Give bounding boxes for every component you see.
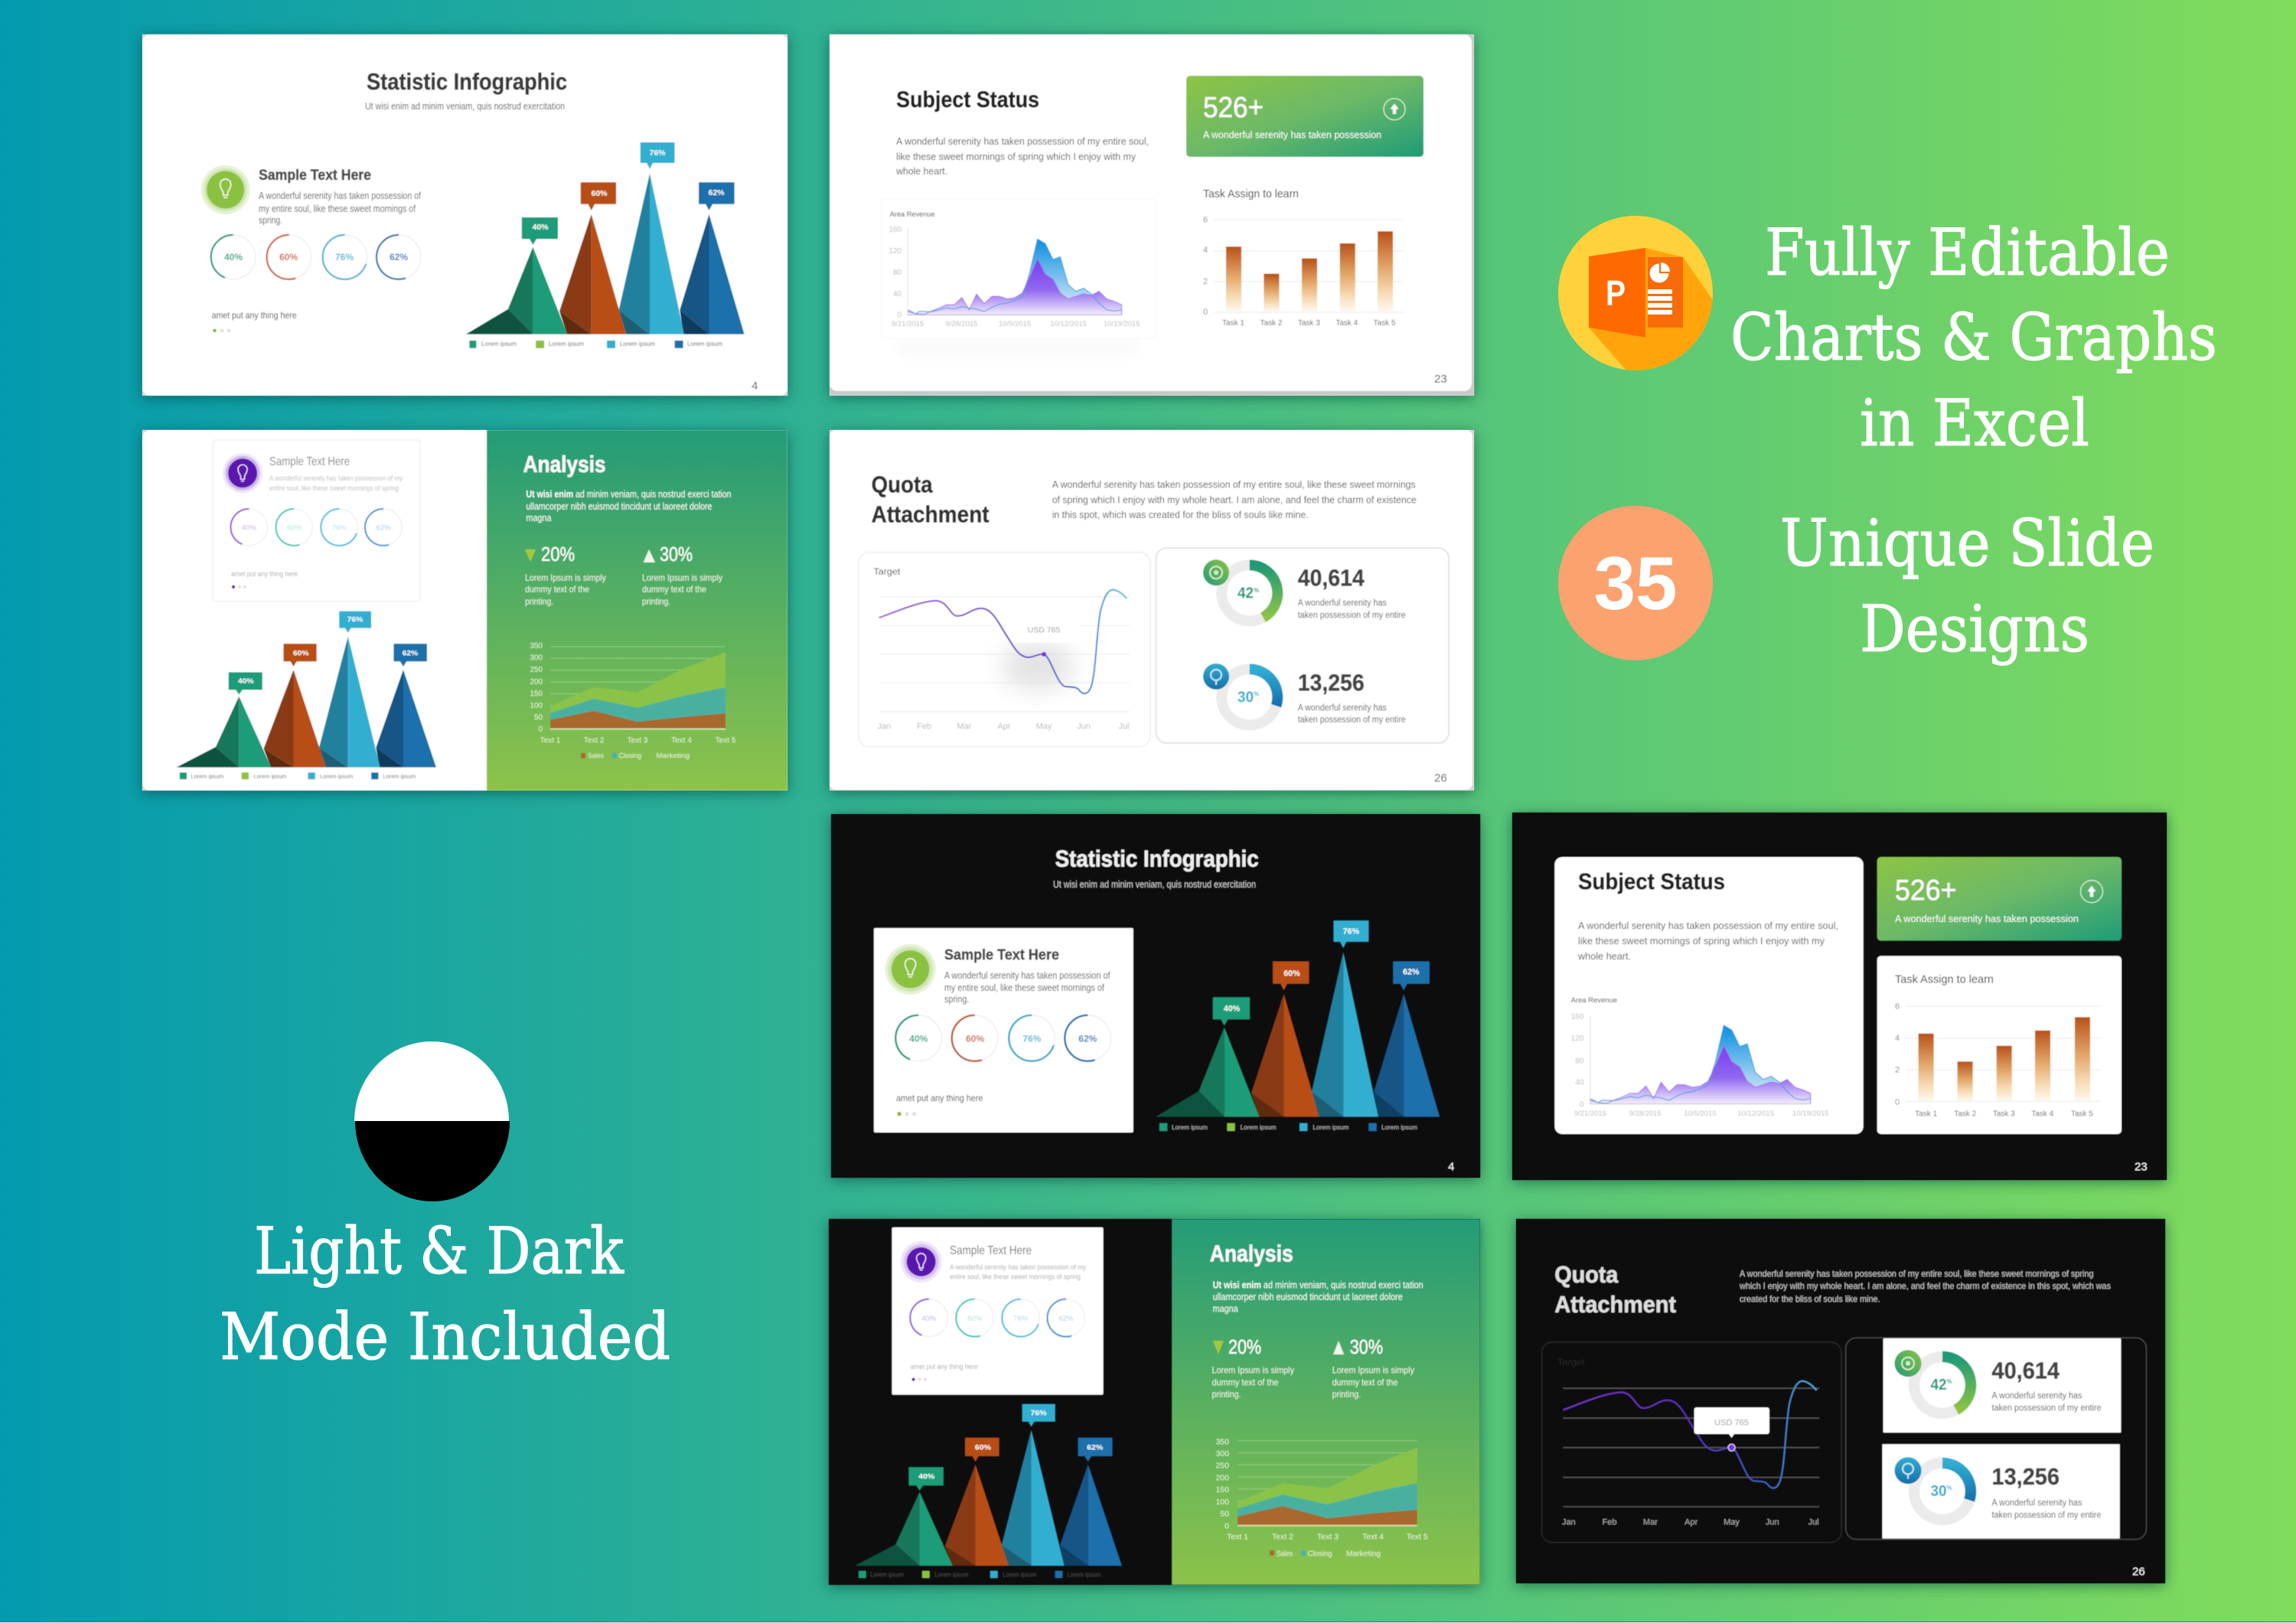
pyramid chart: 62% [1087, 1444, 1103, 1452]
info card: 62% [1058, 1315, 1074, 1323]
info card: amet put any thing here [896, 1093, 983, 1103]
info card [874, 928, 1133, 1133]
slide title: Subject Status [896, 87, 1039, 112]
stat: 30% up: printing. [642, 596, 670, 607]
stat: 20% down: Lorem Ipsum is simply [525, 572, 606, 583]
stacked area chart: 0 [538, 725, 543, 734]
info card: 60% [967, 1315, 983, 1323]
stat card: 13,256: 13,256 [1991, 1463, 2060, 1490]
bar chart card: task assign to learn: Task 4 [2031, 1110, 2054, 1118]
bar chart card: task assign to learn: Task Assign to learn [1895, 973, 1994, 986]
icon: half white half black circle [354, 1041, 510, 1201]
description text: created for the bliss of souls like mine. [1740, 1294, 1880, 1305]
slide title [1554, 1261, 1676, 1318]
description text [895, 135, 1149, 177]
bar chart: task assign to learn [1203, 187, 1404, 328]
info card: my entire soul, like these sweet mornings of [944, 983, 1104, 993]
stat card: 40,614: 42 [1930, 1377, 1947, 1393]
left white card: 160 [1571, 1013, 1584, 1022]
description text: A wonderful serenity has taken possession of my entire soul, like these sweet mornings [1052, 478, 1416, 490]
stat: 30% up: dummy text of the [642, 584, 706, 595]
left white card: Subject Status [1578, 869, 1725, 895]
left white card: 10/12/2015 [1737, 1110, 1774, 1118]
area chart card: 160 [889, 226, 902, 234]
line chart card: Jun [1077, 722, 1091, 732]
pyramid chart [177, 611, 436, 780]
left white card: whole heart. [1577, 950, 1631, 962]
left white card: 10/5/2015 [1684, 1110, 1717, 1118]
left white card: A wonderful serenity has taken possession of my entire soul, [1578, 920, 1838, 931]
stat card: 40,614 [1883, 1338, 2121, 1432]
pyramid chart [856, 1404, 1122, 1578]
line chart card: Jan [1562, 1517, 1576, 1527]
heading: unique slide designs: Designs [1860, 592, 2089, 666]
heading: light and dark mode [220, 1214, 670, 1374]
bar chart: task assign to learn: 4 [1203, 246, 1208, 255]
bar chart card: task assign to learn: 0 [1895, 1097, 1900, 1106]
stat card: 526+: A wonderful serenity has taken possession [1203, 130, 1381, 141]
heading: fully editable charts [1730, 215, 2217, 461]
donut stats card: % [1254, 587, 1259, 594]
description text: my entire soul, like these sweet mornings of [259, 204, 416, 214]
stacked area chart: 50 [1220, 1509, 1229, 1518]
pyramid chart: Lorem ipsum [1172, 1123, 1208, 1131]
pyramid chart [1156, 921, 1440, 1131]
stat: 20% down: 20% [541, 543, 575, 565]
stacked area chart: 200 [530, 678, 543, 686]
stat card: 13,256: % [1947, 1484, 1952, 1491]
analysis paragraph: Ut wisi enim ad minim veniam, quis nostrud exerci tation [1213, 1279, 1424, 1290]
bar chart: task assign to learn: Task 4 [1336, 319, 1358, 328]
slide subtitle: Ut wisi enim ad minim veniam, quis nostrud exercitation [365, 101, 565, 112]
description text [1052, 478, 1417, 520]
description text: A wonderful serenity has taken possession of my entire soul, like these sweet mornings of spring [1740, 1268, 2094, 1279]
stacked area chart: Text 1 [1227, 1533, 1248, 1542]
progress rings: 40% [224, 252, 243, 262]
stat: 20% down: dummy text of the [525, 584, 589, 595]
line chart card: Jan [877, 722, 891, 732]
stacked area chart: 300 [530, 654, 543, 663]
stacked area chart: Text 2 [584, 737, 605, 745]
pyramid chart: Lorem ipsum [1067, 1571, 1101, 1578]
stacked area chart: Closing [1308, 1550, 1332, 1558]
heading: fully editable charts: in Excel [1860, 386, 2089, 461]
stacked area chart: Text 5 [716, 737, 736, 745]
bar chart: task assign to learn: 0 [1203, 308, 1208, 317]
info card: 62% [1078, 1034, 1097, 1045]
slide title: Quota [1554, 1261, 1619, 1288]
info card: amet put any thing here [911, 1363, 978, 1371]
stat card: 13,256: A wonderful serenity has [1991, 1498, 2082, 1507]
stacked area chart: 150 [1215, 1485, 1229, 1494]
line chart card: USD 765 [1028, 626, 1060, 635]
pyramid chart: Lorem ipsum [320, 772, 353, 780]
left white card: 80 [1575, 1057, 1584, 1065]
bar chart: task assign to learn: Task 2 [1261, 319, 1283, 328]
pyramid chart [466, 142, 744, 348]
bar chart: task assign to learn: Task Assign to learn [1203, 187, 1299, 200]
stacked area chart: Marketing [1346, 1550, 1381, 1558]
stacked area chart: Sales [1277, 1550, 1293, 1558]
pyramid chart: Lorem ipsum [1313, 1123, 1349, 1131]
stacked area chart: 250 [530, 666, 543, 674]
left white card [1554, 857, 1864, 1134]
stat: 20% down [1212, 1335, 1294, 1400]
stacked area chart: 200 [1215, 1473, 1229, 1482]
stacked area chart: 50 [534, 714, 543, 722]
page number: 26 [2132, 1565, 2145, 1578]
stacked area chart: Text 4 [1362, 1533, 1384, 1542]
donut stats card outline [1846, 1338, 2146, 1540]
info card: 40% [242, 523, 256, 533]
pagination dots [213, 329, 230, 332]
stacked area chart: Marketing [656, 752, 690, 761]
stacked area chart: 250 [1215, 1462, 1229, 1471]
bar chart card: task assign to learn: 6 [1895, 1002, 1900, 1011]
line chart card: Mar [1643, 1517, 1658, 1527]
stat: 20% down: printing. [1212, 1389, 1241, 1400]
page number: 26 [1434, 772, 1447, 785]
pyramid chart: 40% [238, 678, 254, 686]
stat: 30% up: dummy text of the [1332, 1377, 1398, 1388]
info card: A wonderful serenity has taken possession of [944, 970, 1110, 981]
stat card: 40,614: % [1947, 1378, 1952, 1385]
pyramid chart: Lorem ipsum [1241, 1123, 1277, 1131]
icon: PowerPoint badge: P [1606, 273, 1626, 313]
stat card: 526+ [1877, 857, 2122, 940]
analysis paragraph [526, 489, 731, 523]
stacked area chart: Text 1 [540, 737, 561, 745]
bar chart: task assign to learn: 2 [1203, 277, 1208, 286]
area chart card [881, 199, 1156, 355]
slide: light subject status [830, 34, 1474, 396]
stacked area chart: Text 4 [671, 737, 692, 745]
slide: light statistic infographic [142, 34, 788, 396]
stat: 30% up: printing. [1332, 1389, 1361, 1400]
pyramid chart: 76% [347, 616, 364, 624]
info card: amet put any thing here [231, 570, 298, 578]
pyramid chart: Lorem ipsum [870, 1571, 904, 1578]
donut stats card: 42 [1238, 585, 1254, 602]
stacked area chart: 150 [530, 689, 543, 698]
pyramid chart: Lorem ipsum [254, 772, 287, 780]
line chart card: Mar [957, 722, 972, 732]
bar chart: task assign to learn: Task 3 [1298, 319, 1320, 328]
slide: light quota attachment [830, 430, 1474, 790]
info card: 62% [376, 523, 391, 533]
stacked area chart: 0 [1225, 1521, 1229, 1530]
donut stats card: taken possession of my entire [1298, 715, 1406, 725]
page number: 4 [1448, 1160, 1454, 1173]
line chart card: Feb [917, 722, 931, 732]
line chart card: Apr [997, 722, 1011, 732]
left white card: like these sweet mornings of spring which I enjoy with my [1578, 935, 1825, 947]
description text: like these sweet mornings of spring which I enjoy with my [896, 151, 1136, 162]
donut stats card: A wonderful serenity has [1298, 599, 1387, 608]
icon: PowerPoint badge [1558, 216, 1714, 375]
slide: dark subject status [1512, 813, 2167, 1180]
line chart card: Jun [1766, 1517, 1779, 1527]
pyramid chart: Lorem ipsum [481, 340, 517, 347]
description text: A wonderful serenity has taken possession of [259, 191, 421, 201]
info card: 40% [921, 1315, 937, 1323]
heading: unique slide designs: Unique Slide [1780, 506, 2154, 581]
icon: light bulb [201, 165, 250, 214]
slide: light analysis [142, 430, 788, 790]
pyramid chart: 40% [532, 223, 549, 232]
stacked area chart [530, 642, 736, 761]
pyramid chart: 76% [1343, 927, 1359, 936]
bar chart: task assign to learn: Task 1 [1222, 319, 1244, 328]
stat card: 526+: A wonderful serenity has taken possession [1895, 914, 2079, 924]
stat card: 526+ [1186, 76, 1424, 157]
donut stats card: 40,614 [1298, 565, 1365, 592]
info card [892, 1227, 1104, 1395]
stat card: 13,256: 30 [1930, 1483, 1947, 1500]
bar chart: task assign to learn: Task 5 [1374, 319, 1396, 328]
area chart card: 40 [893, 290, 902, 298]
analysis paragraph: ullamcorper nibh euismod tincidunt ut laoreet dolore [526, 501, 712, 512]
description text: whole heart. [895, 165, 947, 177]
donut stats card: 30 [1238, 689, 1254, 706]
line chart card: May [1036, 722, 1052, 732]
page number: 23 [2135, 1160, 2148, 1173]
description text [259, 191, 421, 226]
analysis heading: Analysis [523, 451, 606, 477]
info card: entire soul, like these sweet mornings of spring [269, 484, 399, 493]
line chart card: Jul [1118, 722, 1129, 732]
info card [213, 440, 420, 601]
info card: 76% [1013, 1315, 1029, 1323]
slide title: Quota [871, 471, 933, 497]
slide subtitle: Ut wisi enim ad minim veniam, quis nostrud exercitation [1053, 879, 1256, 890]
stacked area chart: 100 [530, 702, 543, 710]
left white card: 9/28/2015 [1629, 1110, 1662, 1118]
donut stats card: 13,256 [1298, 670, 1365, 696]
left white card: Area Revenue [1571, 996, 1617, 1004]
stacked area chart: Text 2 [1272, 1533, 1293, 1542]
pyramid chart: 76% [649, 148, 666, 158]
stacked area chart: Text 3 [1317, 1533, 1339, 1542]
badge: 35 [1558, 506, 1713, 660]
stacked area chart: Text 3 [628, 737, 648, 745]
pyramid chart: Lorem ipsum [687, 340, 722, 347]
pyramid chart: 62% [403, 650, 419, 657]
page number: 4 [752, 380, 758, 393]
progress rings [211, 235, 421, 279]
area chart card: Area Revenue [890, 210, 935, 218]
description text [1739, 1268, 2111, 1305]
stat card: 526+: 526+ [1203, 92, 1264, 124]
info card: 76% [332, 523, 347, 533]
badge: 35: 35 [1593, 541, 1678, 625]
info card: 76% [1022, 1034, 1042, 1045]
pyramid chart: 62% [708, 188, 725, 197]
left white card: 120 [1571, 1035, 1584, 1043]
area chart card: 9/21/2015 [892, 320, 924, 328]
stat card: 40,614: A wonderful serenity has [1991, 1391, 2082, 1400]
pyramid chart: Lorem ipsum [383, 772, 416, 780]
slide title: Statistic Infographic [367, 68, 567, 95]
stat: 20% down: Lorem Ipsum is simply [1212, 1364, 1294, 1375]
stat card: 13,256: taken possession of my entire [1991, 1511, 2102, 1520]
stacked area chart: 300 [1215, 1449, 1229, 1458]
line chart card [1541, 1342, 1841, 1543]
info card: Sample Text Here [944, 947, 1059, 963]
area chart card: 0 [897, 311, 902, 319]
stat: 20% down: 20% [1228, 1335, 1261, 1358]
pyramid chart: Lorem ipsum [934, 1571, 968, 1578]
info card: spring. [944, 994, 969, 1005]
slide: dark statistic infographic [831, 814, 1480, 1178]
pyramid chart: 60% [293, 650, 309, 657]
description text: A wonderful serenity has taken possession of my entire soul, [896, 135, 1149, 147]
donut stats card: A wonderful serenity has [1298, 703, 1387, 712]
bar chart card: task assign to learn: 4 [1895, 1034, 1900, 1043]
stat card: 526+: 526+ [1895, 875, 1956, 907]
analysis paragraph: Ut wisi enim ad minim veniam, quis nostrud exerci tation [526, 489, 731, 500]
bar chart card: task assign to learn: Task 1 [1915, 1110, 1938, 1118]
analysis panel background [1172, 1219, 1480, 1585]
analysis heading: Analysis [1210, 1240, 1293, 1266]
left white card: 0 [1580, 1101, 1584, 1110]
bar chart card: task assign to learn: Task 3 [1993, 1110, 2015, 1118]
line chart card: Apr [1684, 1517, 1698, 1527]
info card: Sample Text Here [950, 1244, 1032, 1257]
line chart card: Feb [1603, 1517, 1616, 1527]
info card: A wonderful serenity has taken possession of my [269, 474, 403, 483]
footer note: amet put any thing here [212, 310, 297, 321]
slide title [871, 471, 989, 527]
left white card: 9/21/2015 [1574, 1110, 1606, 1118]
bar chart card: task assign to learn: 2 [1895, 1066, 1900, 1075]
pyramid chart: Lorem ipsum [1003, 1571, 1036, 1578]
left white card: 40 [1575, 1079, 1584, 1087]
stat: 20% down [525, 543, 606, 607]
area chart card: 10/5/2015 [999, 320, 1031, 328]
heading: fully editable charts: Fully Editable [1765, 215, 2170, 290]
info card: 40% [909, 1034, 928, 1045]
bar chart card: task assign to learn: Task 5 [2071, 1110, 2093, 1118]
description text: in this spot, which was created for the bliss of souls like mine. [1052, 509, 1309, 520]
analysis paragraph: magna [526, 513, 551, 523]
stat: 30% up [1332, 1335, 1414, 1400]
pyramid chart: 60% [975, 1444, 991, 1452]
stat card: 13,256 [1882, 1444, 2120, 1539]
stat: 30% up [642, 543, 722, 607]
line chart card: Jul [1808, 1517, 1819, 1527]
line chart card: Target [873, 568, 901, 577]
line chart card: May [1724, 1517, 1740, 1527]
analysis paragraph: magna [1213, 1303, 1238, 1314]
line chart card [859, 552, 1150, 747]
description text: which I enjoy with my whole heart. I am alone, and feel the charm of existence in this spot, which was [1739, 1280, 2111, 1291]
stacked area chart: Sales [588, 752, 604, 761]
bar chart: task assign to learn: 6 [1203, 216, 1208, 225]
stat: 20% down: dummy text of the [1212, 1377, 1279, 1388]
slide title: Statistic Infographic [1055, 845, 1259, 872]
pyramid chart: 40% [918, 1473, 934, 1481]
heading: fully editable charts: Charts & Graphs [1730, 300, 2217, 375]
pyramid chart: Lorem ipsum [191, 772, 223, 780]
stat: 30% up: 30% [660, 543, 693, 565]
info card: 60% [966, 1034, 984, 1045]
info card: 60% [287, 523, 302, 533]
stat: 20% down: printing. [525, 596, 553, 607]
stacked area chart: Text 5 [1407, 1533, 1428, 1542]
description text: of spring which I enjoy with my whole heart. I am alone, and feel the charm of existence [1052, 494, 1417, 505]
stat card: 40,614: taken possession of my entire [1991, 1403, 2102, 1413]
area chart card: 80 [893, 269, 902, 277]
heading: light and dark mode: Light & Dark [254, 1214, 625, 1289]
donut stats card: % [1254, 690, 1259, 698]
pyramid chart: 60% [1283, 970, 1300, 979]
stat: 30% up: 30% [1350, 1335, 1383, 1358]
stat card: 40,614: 40,614 [1991, 1357, 2060, 1384]
bar chart card: task assign to learn: Task 2 [1954, 1110, 1977, 1118]
stacked area chart: 350 [1215, 1437, 1229, 1446]
info card: Sample Text Here [269, 455, 350, 468]
pyramid chart: 40% [1224, 1005, 1241, 1014]
pyramid chart: 60% [591, 189, 608, 198]
analysis paragraph: ullamcorper nibh euismod tincidunt ut laoreet dolore [1213, 1292, 1403, 1302]
slide: dark analysis [829, 1219, 1480, 1585]
stacked area chart: 100 [1215, 1498, 1229, 1507]
heading: light and dark mode: Mode Included [220, 1299, 670, 1374]
stacked area chart: Closing [619, 752, 641, 761]
line chart card: USD 765 [1714, 1419, 1749, 1428]
stacked area chart [1215, 1437, 1428, 1558]
progress rings: 76% [335, 252, 354, 262]
area chart card: 10/19/2015 [1104, 320, 1140, 328]
page number: 23 [1434, 373, 1447, 386]
area chart card: 9/28/2015 [945, 320, 977, 328]
left white card: 10/19/2015 [1792, 1110, 1828, 1118]
stat: 30% up: Lorem Ipsum is simply [1332, 1364, 1414, 1375]
analysis panel background [487, 430, 788, 790]
info card: entire soul, like these sweet mornings of spring [950, 1273, 1081, 1282]
pyramid chart: 62% [1403, 968, 1420, 977]
line chart card: Target [1557, 1358, 1586, 1367]
sample heading: Sample Text Here [259, 168, 371, 184]
slide title: Attachment [1554, 1291, 1676, 1318]
slide title: Attachment [871, 500, 989, 527]
area chart card: 120 [889, 247, 902, 256]
donut stats card [1156, 548, 1449, 743]
progress rings: 60% [279, 252, 298, 262]
progress rings: 62% [390, 252, 408, 262]
stat: 30% up: Lorem Ipsum is simply [642, 572, 722, 583]
pyramid chart: Lorem ipsum [620, 340, 655, 347]
slide: dark quota attachment [1516, 1219, 2165, 1583]
description text: spring. [259, 215, 282, 226]
stacked area chart: 350 [530, 642, 543, 650]
bar chart card: task assign to learn [1877, 956, 2122, 1134]
pyramid chart: Lorem ipsum [1381, 1123, 1417, 1131]
area chart card: 10/12/2015 [1050, 320, 1087, 328]
analysis paragraph [1213, 1279, 1424, 1314]
info card: A wonderful serenity has taken possession of my [950, 1263, 1086, 1272]
pyramid chart: Lorem ipsum [549, 340, 584, 347]
pyramid chart: 76% [1031, 1410, 1047, 1417]
donut stats card: taken possession of my entire [1298, 611, 1406, 620]
heading: unique slide designs [1780, 506, 2154, 666]
